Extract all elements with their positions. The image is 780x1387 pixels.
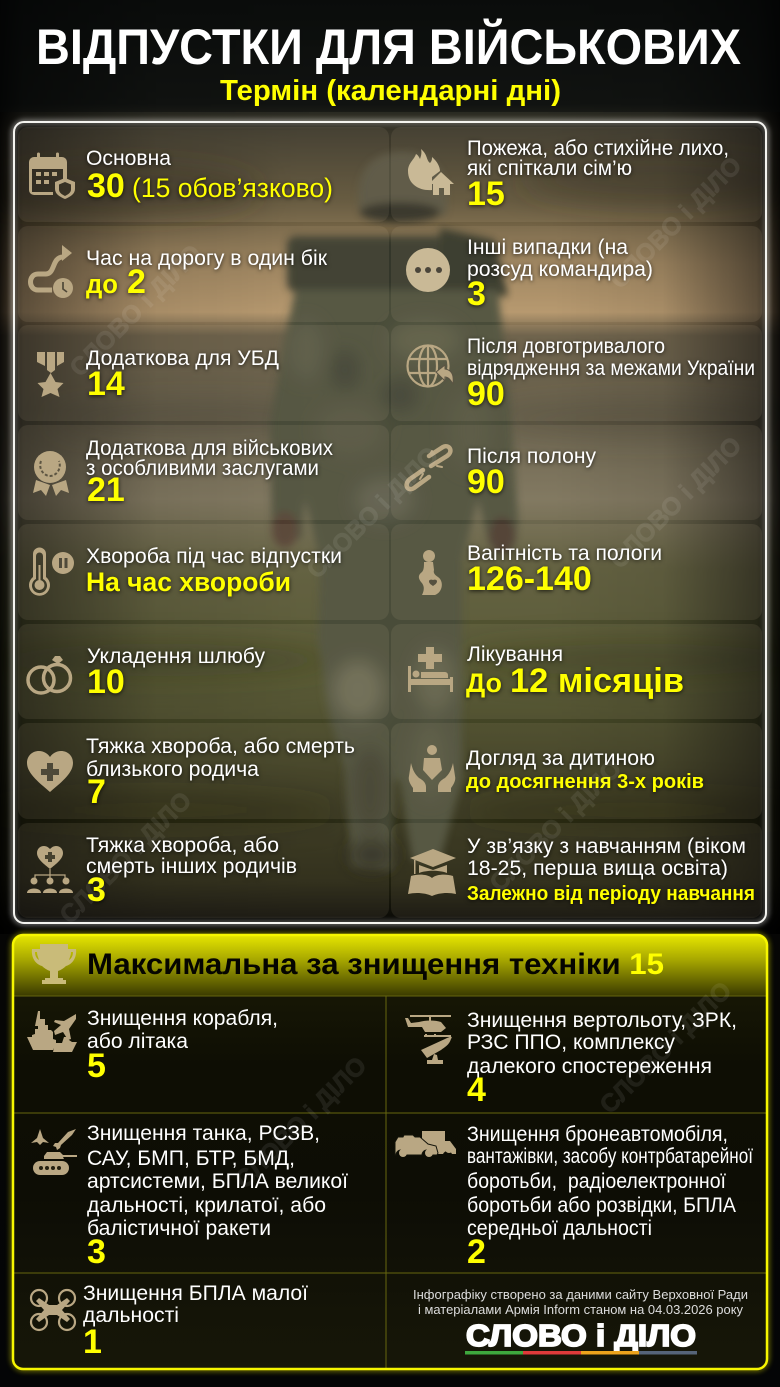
- cell: ship or plane: 5: [87, 1047, 106, 1085]
- card: close relative illness: Тяжка хвороба, або смерть: [86, 734, 355, 758]
- cell: helicopter: Знищення вертольоту, ЗРК,: [467, 1008, 737, 1032]
- cell: tank and missile: Знищення танка, РСЗВ,: [87, 1121, 320, 1145]
- cell: armored vehicle and truck: 2: [467, 1233, 486, 1271]
- cell: ship or plane: [27, 1006, 278, 1085]
- cell: tank and missile: артсистеми, БПЛА великої: [87, 1169, 348, 1193]
- cell: small drone: 1: [83, 1323, 102, 1361]
- card: pregnancy: [391, 524, 762, 620]
- card: after captivity: Після полону: [467, 444, 596, 468]
- cell: tank and missile: балістичної ракети: [87, 1216, 271, 1240]
- cell: small drone: Знищення БПЛА малої: [83, 1281, 308, 1305]
- cell: helicopter: [405, 1008, 737, 1109]
- cell: helicopter: 4: [467, 1071, 486, 1109]
- cell: armored vehicle and truck: боротьби, радіоелектронної: [467, 1169, 726, 1193]
- icon: armored car and truck: [395, 1131, 456, 1157]
- icon: wreath badge: [33, 451, 69, 496]
- card: road time: Час на дорогу в один бік: [86, 246, 328, 270]
- icon: globe with return arrow: [408, 345, 453, 387]
- card: pregnancy: Вагітність та пологи: [467, 541, 662, 565]
- card: other cases: розсуд командира): [467, 257, 653, 281]
- card: child care: до досягнення 3-х років: [466, 771, 704, 793]
- card: main vacation: (15 обов’язково): [132, 173, 333, 203]
- icon: tank, jet and rocket: [31, 1129, 77, 1175]
- card: main vacation: 30: [87, 167, 125, 205]
- icon: hospital bed: [408, 647, 453, 692]
- card: child care: Догляд за дитиною: [466, 746, 655, 770]
- cell: armored vehicle and truck: Знищення бронеавтомобіля,: [467, 1122, 728, 1146]
- icon: hands holding child: [409, 745, 455, 792]
- card: combat participants: Додаткова для УБД: [86, 346, 279, 370]
- card: long mission abroad: відрядження за межами України: [467, 356, 755, 380]
- icon: helicopter and missile launcher: [405, 1015, 452, 1064]
- card: special merits: з особливими заслугами: [86, 456, 319, 480]
- card: road time: 2: [127, 263, 146, 301]
- card: main vacation: Основна: [86, 146, 171, 170]
- card: combat participants: [18, 325, 389, 421]
- cell: armored vehicle and truck: [395, 1122, 753, 1271]
- card: special merits: [18, 425, 389, 520]
- card: education: [391, 823, 762, 918]
- watermarks: [54, 151, 747, 1194]
- watermarks: СЛОВО і ДІЛО: [64, 239, 207, 382]
- panel: vacation types frame: [14, 122, 766, 923]
- cell: small drone: [31, 1281, 308, 1361]
- card: other cases: Інші випадки (на: [467, 235, 628, 259]
- source note: Інфографіку створено за даними сайту Верховної Ради: [413, 1287, 748, 1302]
- card: long mission abroad: [391, 325, 762, 421]
- card: marriage: [18, 624, 389, 719]
- cell: small drone: дальності: [83, 1303, 179, 1327]
- card: close relative illness: 7: [87, 773, 106, 811]
- icon: calendar with shield: [29, 152, 75, 199]
- source note: і матеріалами Армія Inform станом на 04.03.2026 року: [418, 1302, 743, 1317]
- icon: thermometer with pause: [29, 548, 74, 596]
- card: fire or disaster: які спіткали сім’ю: [467, 156, 632, 180]
- cell: helicopter: далекого спостереження: [467, 1054, 712, 1078]
- title: ВІДПУСТКИ ДЛЯ ВІЙСЬКОВИХ: [36, 18, 741, 75]
- cell: tank and missile: [31, 1121, 348, 1271]
- card: treatment: [391, 624, 762, 719]
- watermarks: СЛОВО і ДІЛО: [229, 1051, 372, 1194]
- icon: broken chain: [407, 446, 450, 489]
- source note: [413, 1287, 748, 1317]
- cell: armored vehicle and truck: боротьби або розвідки, БПЛА: [467, 1193, 737, 1217]
- card: other relatives illness: смерть інших родичів: [86, 854, 297, 878]
- cell: ship or plane: Знищення корабля,: [87, 1006, 278, 1030]
- cell: tank and missile: 3: [87, 1233, 106, 1271]
- card: other relatives illness: 3: [87, 871, 106, 909]
- card: fire or disaster: [391, 127, 762, 222]
- icon: route with clock: [30, 245, 73, 298]
- icon: trophy: [32, 944, 76, 984]
- card: long mission abroad: Після довготривалого: [467, 334, 665, 358]
- watermarks: СЛОВО і ДІЛО: [301, 441, 444, 584]
- cell: tank and missile: САУ, БМП, БТР, БМД,: [87, 1146, 295, 1170]
- cell: helicopter: РЗС ППО, комплексу: [467, 1030, 675, 1054]
- icon: rings: [28, 656, 70, 693]
- icon: ellipsis circle: [406, 248, 450, 292]
- subtitle: Термін (календарні дні): [220, 75, 561, 107]
- card: after captivity: [391, 425, 762, 520]
- card: close relative illness: близького родича: [86, 757, 259, 781]
- card: treatment: Лікування: [467, 642, 563, 666]
- card: main vacation: [18, 127, 389, 222]
- card: other cases: [391, 226, 762, 322]
- cell: armored vehicle and truck: середньої дальності: [467, 1216, 652, 1240]
- watermarks: СЛОВО і ДІЛО: [604, 151, 747, 294]
- icon: heart with family tree: [27, 846, 73, 893]
- card: fire or disaster: Пожежа, або стихійне лихо,: [467, 136, 729, 160]
- watermarks: СЛОВО і ДІЛО: [604, 431, 747, 574]
- card: other relatives illness: Тяжка хвороба, або: [86, 833, 279, 857]
- panel: destroyed equipment: [13, 935, 767, 1369]
- panel: vacation cards: [18, 127, 762, 918]
- card: close relative illness: [18, 723, 389, 819]
- card: education: У зв’язку з навчанням (віком: [467, 834, 746, 858]
- card: other relatives illness: [18, 823, 389, 918]
- card: special merits: Додаткова для військових: [86, 436, 333, 460]
- cell: tank and missile: дальності, крилатої, або: [87, 1193, 326, 1217]
- card: combat participants: 14: [87, 365, 125, 403]
- card: illness during leave: На час хвороби: [86, 567, 291, 597]
- card: special merits: 21: [87, 471, 125, 509]
- logo: Слово і Діло: СЛОВО і ДІЛО: [466, 1318, 696, 1353]
- heading: Максимальна за знищення техніки 15: [87, 948, 664, 981]
- card: after captivity: 90: [467, 463, 505, 501]
- card: pregnancy: 126-140: [467, 560, 592, 598]
- card: road time: до: [86, 269, 118, 299]
- icon: heart with cross: [27, 751, 73, 792]
- icon: medal: [37, 352, 64, 397]
- card: education: 18-25, перша вища освіта): [467, 856, 728, 880]
- icon: drone: [31, 1290, 75, 1330]
- watermarks: СЛОВО і ДІЛО: [594, 976, 737, 1119]
- card: illness during leave: Хвороба під час відпустки: [86, 544, 342, 568]
- icon: fire and house: [408, 149, 454, 195]
- card: treatment: 12 місяців: [510, 662, 684, 700]
- cell: ship or plane: або літака: [87, 1029, 188, 1053]
- watermarks: СЛОВО і ДІЛО: [484, 754, 627, 897]
- watermarks: СЛОВО і ДІЛО: [54, 786, 197, 929]
- card: road time: [18, 226, 389, 322]
- card: marriage: 10: [87, 663, 125, 701]
- icon: graduation cap and book: [408, 849, 456, 896]
- card: child care: [391, 723, 762, 819]
- card: fire or disaster: 15: [467, 175, 505, 213]
- card: illness during leave: [18, 524, 389, 620]
- card: treatment: До: [466, 668, 502, 698]
- card: education: Залежно від періоду навчання: [467, 883, 755, 905]
- card: long mission abroad: 90: [467, 375, 505, 413]
- card: marriage: Укладення шлюбу: [87, 644, 265, 668]
- icon: ship and plane: [27, 1011, 77, 1052]
- icon: pregnant woman: [419, 550, 442, 595]
- card: other cases: 3: [467, 275, 486, 313]
